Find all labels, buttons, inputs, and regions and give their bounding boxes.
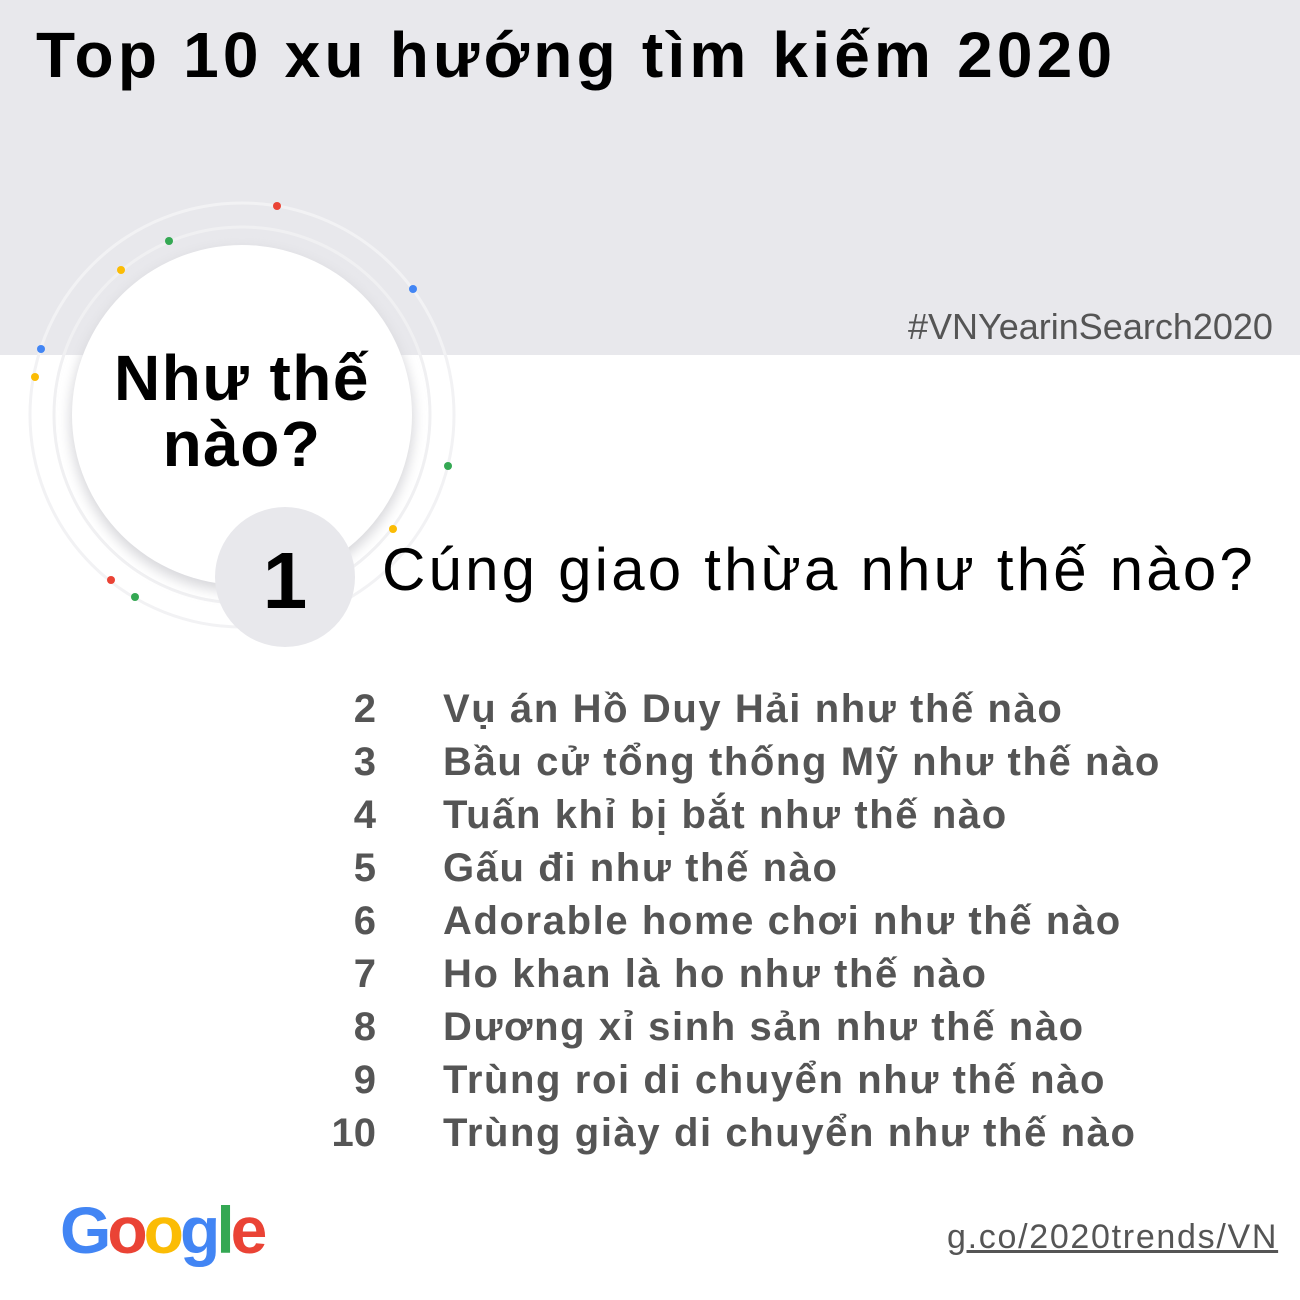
ranked list: Gấu đi như thế nào	[443, 846, 839, 890]
hashtag: #VNYearinSearch2020	[908, 306, 1273, 347]
top gray band	[0, 0, 1300, 355]
circle graphic	[28, 202, 456, 647]
circle heading: Như thế	[114, 342, 370, 414]
ranked list: 3	[354, 740, 376, 784]
ranked list: 10	[332, 1111, 376, 1155]
circle heading	[114, 342, 370, 480]
rank 1 number: 1	[263, 536, 307, 625]
google logo: Google	[60, 1193, 263, 1267]
ranked list: Adorable home chơi như thế nào	[443, 899, 1122, 943]
ranked list: 7	[354, 952, 376, 996]
ranked list: Dương xỉ sinh sản như thế nào	[443, 1005, 1085, 1049]
circle heading: nào?	[163, 408, 321, 480]
ranked list: 4	[354, 793, 376, 837]
rank 1 text: Cúng giao thừa như thế nào?	[382, 536, 1256, 603]
ranked list: Tuấn khỉ bị bắt như thế nào	[443, 793, 1008, 837]
ranked list: Trùng giày di chuyển như thế nào	[443, 1111, 1137, 1155]
ranked list: 5	[354, 846, 376, 890]
ranked list: 6	[354, 899, 376, 943]
ranked list	[332, 687, 1161, 1155]
ranked list: Vụ án Hồ Duy Hải như thế nào	[443, 687, 1063, 731]
title: Top 10 xu hướng tìm kiếm 2020	[36, 19, 1116, 91]
ranked list: 2	[354, 687, 376, 731]
url: g.co/2020trends/VN	[947, 1218, 1278, 1256]
ranked list: Bầu cử tổng thống Mỹ như thế nào	[443, 740, 1161, 784]
ranked list: 8	[354, 1005, 376, 1049]
ranked list: 9	[354, 1058, 376, 1102]
ranked list: Trùng roi di chuyển như thế nào	[443, 1058, 1106, 1102]
ranked list: Ho khan là ho như thế nào	[443, 952, 988, 996]
